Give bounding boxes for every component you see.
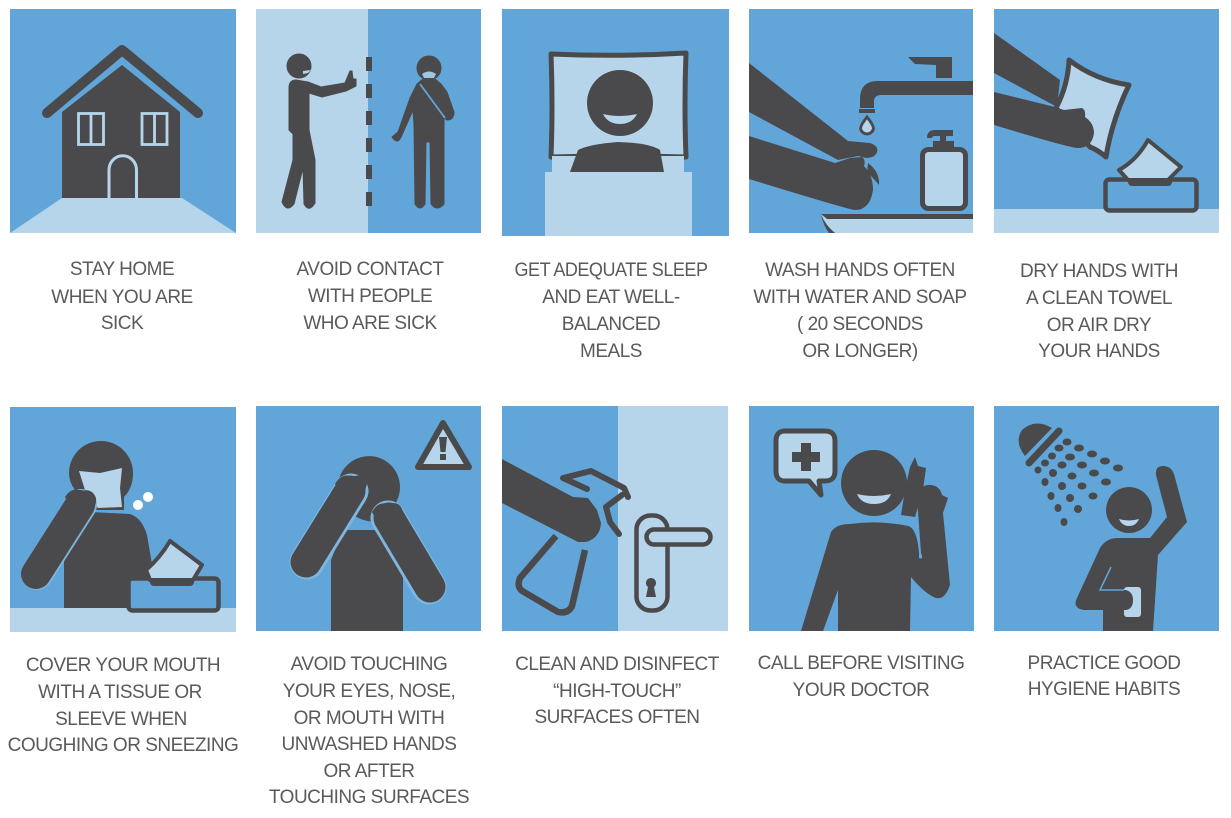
icon: washing hands xyxy=(749,63,879,210)
caption: call doctor: YOUR DOCTOR xyxy=(793,680,929,701)
dashed divider xyxy=(366,57,372,206)
icon: door handle xyxy=(636,516,710,610)
panel: cover mouth xyxy=(10,407,236,632)
caption: dry hands: YOUR HANDS xyxy=(1038,341,1160,362)
caption: avoid touching: YOUR EYES, NOSE, xyxy=(283,681,455,702)
panel: good hygiene xyxy=(994,406,1219,631)
icon: speech bubble with plus xyxy=(776,431,835,495)
caption: dry hands: DRY HANDS WITH xyxy=(1020,261,1178,282)
icon: faucet xyxy=(859,57,973,113)
icon: water drops xyxy=(1034,438,1123,526)
floor xyxy=(10,608,236,632)
basin xyxy=(821,214,973,233)
icon: warning triangle xyxy=(418,423,469,467)
panel: sleep and eat xyxy=(502,9,729,236)
caption: dry hands xyxy=(1020,261,1178,362)
icon: shower head xyxy=(1019,423,1059,463)
caption: stay home: SICK xyxy=(101,313,144,334)
icon: towel xyxy=(1056,60,1129,157)
panel: dry hands xyxy=(994,9,1219,233)
panel: clean and disinfect xyxy=(502,406,728,631)
soap xyxy=(1124,587,1141,617)
icon: person coughing xyxy=(392,56,454,208)
body and raised arm xyxy=(1076,466,1187,631)
body and arm xyxy=(801,485,950,631)
upper arm xyxy=(994,33,1060,107)
caption: dry hands: A CLEAN TOWEL xyxy=(1026,288,1172,309)
caption: avoid contact: WHO ARE SICK xyxy=(303,313,438,334)
body xyxy=(331,530,403,631)
caption: sleep and meals xyxy=(514,260,708,362)
caption: cover mouth: COUGHING OR SNEEZING xyxy=(8,735,238,756)
body xyxy=(64,512,153,608)
head xyxy=(338,456,400,522)
caption: cover mouth: WITH A TISSUE OR xyxy=(38,682,202,703)
forearm xyxy=(1100,590,1133,610)
icon: smiling head xyxy=(841,450,907,516)
icon: droplets xyxy=(133,492,153,510)
caption: dry hands: OR AIR DRY xyxy=(1047,315,1152,336)
icon: phone xyxy=(901,457,926,517)
pillow xyxy=(551,53,686,157)
shoulders xyxy=(570,142,664,172)
panel: call doctor xyxy=(749,406,974,631)
caption: clean surfaces: SURFACES OFTEN xyxy=(534,707,700,728)
icon: head with tissue xyxy=(69,441,133,510)
panel: wash hands xyxy=(749,9,973,233)
icon: right arm xyxy=(372,503,430,587)
caption: cover mouth: COVER YOUR MOUTH xyxy=(26,655,220,676)
caption: sleep and meals: BALANCED xyxy=(562,314,660,335)
caption: sleep and meals: GET ADEQUATE SLEEP xyxy=(514,260,708,281)
icon: left arm xyxy=(306,476,367,562)
lower arm xyxy=(994,92,1094,148)
caption: wash hands: ( 20 SECONDS xyxy=(797,314,923,335)
icon: smiling head xyxy=(1106,487,1152,533)
caption: avoid contact: WITH PEOPLE xyxy=(308,286,432,307)
caption: hygiene xyxy=(1028,653,1180,700)
caption: wash hands: OR LONGER) xyxy=(802,341,918,362)
icon: soap dispenser xyxy=(922,130,966,208)
caption: avoid touching xyxy=(269,654,469,808)
caption: hygiene: PRACTICE GOOD xyxy=(1028,653,1180,674)
caption: wash hands: WASH HANDS OFTEN xyxy=(765,260,955,281)
caption: avoid touching: AVOID TOUCHING xyxy=(291,654,447,675)
caption: call doctor: CALL BEFORE VISITING xyxy=(758,653,964,674)
caption: clean surfaces: CLEAN AND DISINFECT xyxy=(515,654,720,675)
arm holding bottle xyxy=(502,459,601,542)
caption: cover mouth xyxy=(8,655,238,756)
caption: avoid contact: AVOID CONTACT xyxy=(297,259,444,280)
caption: stay home xyxy=(51,259,193,334)
panel: stay home xyxy=(10,9,236,233)
caption: wash hands xyxy=(753,260,967,362)
blanket xyxy=(545,172,692,236)
icon: tissue box xyxy=(1106,140,1196,210)
caption: sleep and meals: AND EAT WELL- xyxy=(542,287,680,308)
caption: avoid touching: TOUCHING SURFACES xyxy=(269,787,469,808)
panel: avoid contact xyxy=(256,9,481,233)
caption: stay home: WHEN YOU ARE xyxy=(51,287,193,308)
icon: spray bottle xyxy=(519,471,628,612)
caption: avoid contact xyxy=(297,259,444,334)
caption: clean surfaces xyxy=(515,654,720,728)
floor xyxy=(994,209,1219,233)
icon: house xyxy=(47,50,198,198)
ground xyxy=(10,198,236,233)
icon: water drop xyxy=(861,117,873,134)
caption: hygiene: HYGIENE HABITS xyxy=(1028,679,1180,700)
caption: clean surfaces: “HIGH-TOUCH” xyxy=(553,681,681,702)
caption: sleep and meals: MEALS xyxy=(580,341,642,362)
icon: arm to mouth xyxy=(36,489,96,574)
caption: avoid touching: OR MOUTH WITH xyxy=(294,708,444,729)
caption: wash hands: WITH WATER AND SOAP xyxy=(753,287,967,308)
caption: avoid touching: OR AFTER xyxy=(323,761,415,782)
caption: stay home: STAY HOME xyxy=(70,259,174,280)
panel: avoid touching face xyxy=(256,406,481,631)
caption: avoid touching: UNWASHED HANDS xyxy=(282,734,456,755)
icon: smiling head xyxy=(587,70,653,136)
icon: person holding out hand xyxy=(282,54,356,208)
caption: cover mouth: SLEEVE WHEN xyxy=(55,709,187,730)
caption: call doctor xyxy=(758,653,964,701)
icon: tissue box xyxy=(128,541,218,610)
